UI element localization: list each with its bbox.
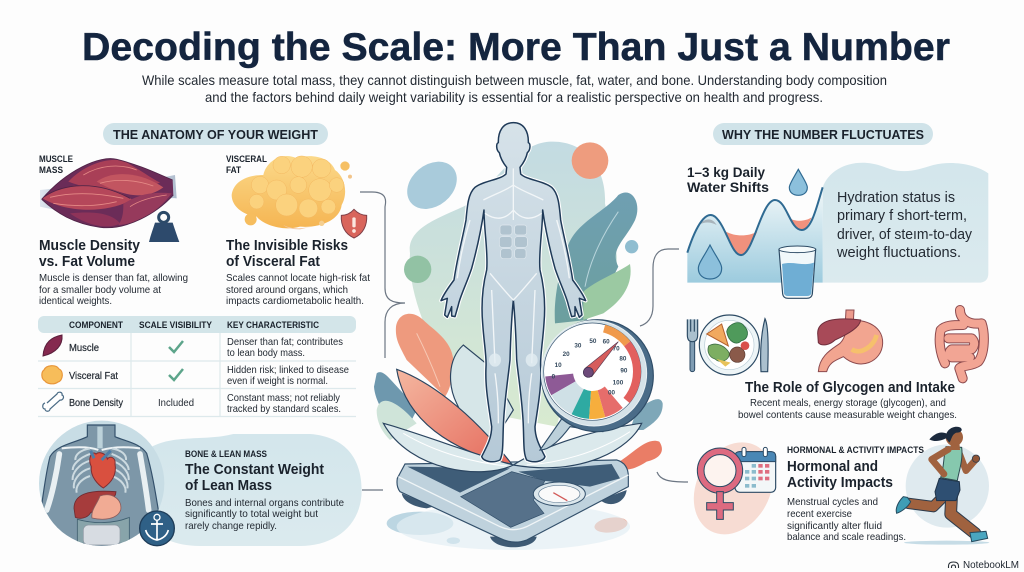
heading: the anatomy of your weight (103, 123, 328, 145)
water heading (687, 164, 769, 195)
muscle text (39, 272, 188, 307)
hormonal text: significantly alter fluid (787, 520, 882, 532)
icon: female symbol and calendar (678, 428, 788, 548)
gauge: 0 (552, 374, 556, 381)
icon: bone (43, 392, 63, 411)
intro text: and the factors behind daily weight variability is essential for a realistic perspective on health and progress. (205, 89, 823, 105)
water text: driver, of steım-to-day (837, 226, 972, 243)
visceral label (226, 154, 267, 176)
intro text: While scales measure total mass, they cannot distinguish between muscle, fat, water, and bone. Understanding body composition (142, 72, 887, 88)
gauge: 90 (620, 368, 628, 375)
icon: runner (896, 427, 989, 545)
muscle label: MUSCLE (39, 154, 73, 165)
visceral text: Scales cannot locate high-risk fat (226, 272, 370, 284)
row: muscle: Muscle (69, 343, 99, 354)
row: visceral fat (42, 364, 349, 387)
row: visceral fat: Hidden risk; linked to disease (227, 364, 349, 376)
water heading: Water Shifts (687, 179, 769, 195)
table header (38, 316, 356, 333)
hormonal heading: Hormonal and (787, 458, 878, 475)
human figure (441, 123, 586, 462)
glycogen text (738, 397, 957, 421)
icon: notebook logo (948, 562, 958, 568)
panel: hormonal and activity (678, 427, 989, 548)
water heading: 1–3 kg Daily (687, 164, 765, 180)
panel: muscle mass (39, 154, 188, 307)
connector: right water (640, 249, 679, 326)
icon: fat cloud (232, 156, 352, 229)
glycogen text: bowel contents cause measurable weight changes. (738, 409, 957, 421)
icon: anchor badge (140, 511, 174, 546)
icon: liver and stomach (818, 310, 883, 372)
muscle heading: vs. Fat Volume (39, 253, 135, 270)
hormonal text (787, 496, 906, 543)
bone heading: of Lean Mass (185, 477, 272, 494)
title: Decoding the Scale: More Than Just a Number (82, 26, 950, 69)
bone text: rarely change repidly. (185, 520, 277, 532)
visceral heading: of Visceral Fat (226, 253, 320, 270)
heading: why the number fluctuates: WHY THE NUMBER FLUCTUATES (722, 127, 924, 142)
water text (836, 189, 972, 261)
icon: check (169, 369, 183, 380)
illustration: torso with organs (39, 420, 164, 546)
connector: right hormonal (657, 472, 688, 482)
bone text (185, 497, 344, 532)
muscle heading (39, 237, 141, 270)
muscle heading: Muscle Density (39, 237, 141, 254)
muscle text: for a smaller body volume at (39, 284, 161, 296)
glycogen text: Recent meals, energy storage (glycogen), and (750, 397, 946, 409)
muscle text: Muscle is denser than fat, allowing (39, 272, 188, 284)
row: muscle (43, 335, 343, 359)
panel: bone and lean mass (33, 420, 362, 553)
row: bone density: tracked by standard scales. (227, 403, 341, 415)
muscle text: identical weights. (39, 295, 112, 307)
visceral label: FAT (226, 165, 241, 176)
hormonal label: HORMONAL & ACTIVITY IMPACTS (787, 445, 924, 456)
hormonal heading: Activity Impacts (787, 474, 893, 491)
hormonal text: balance and scale readings. (787, 531, 906, 543)
water text: Hydration status is (837, 189, 955, 206)
icon: check (169, 341, 183, 352)
bone text: significantly to total weight but (185, 508, 318, 520)
gauge: 60 (603, 339, 610, 346)
visceral text (226, 272, 370, 307)
icon: warning shield (341, 209, 367, 238)
bone heading (185, 461, 324, 494)
bone text: Bones and internal organs contribute (185, 497, 344, 509)
hormonal heading (787, 458, 893, 491)
bathroom scale (397, 460, 630, 550)
gauge: 20 (563, 351, 570, 358)
NotebookLM badge: NotebookLM (963, 559, 1019, 571)
bone label: BONE & LEAN MASS (185, 449, 267, 460)
hormonal text: Menstrual cycles and (787, 496, 878, 508)
panel: water shifts (687, 163, 988, 298)
panel: visceral fat (226, 154, 370, 307)
visceral text: impacts cardiometabolic health. (226, 295, 364, 307)
icon: small fat (42, 366, 62, 384)
glycogen heading: The Role of Glycogen and Intake (745, 380, 955, 396)
row: visceral fat: even if weight is normal. (227, 375, 328, 387)
gauge: 80 (619, 355, 627, 362)
connector: left brace (360, 192, 405, 358)
icon: intestines (940, 310, 984, 378)
row: visceral fat: Visceral Fat (69, 371, 118, 382)
water chart (687, 163, 988, 283)
muscle label: MASS (39, 165, 63, 176)
row: bone density: Included (158, 398, 194, 409)
gauge: 50 (589, 338, 597, 345)
icon: kettle weight (149, 212, 179, 242)
gauge: 70 (613, 346, 620, 353)
gauge (540, 320, 653, 450)
gauge: 30 (574, 342, 582, 349)
row: bone density: Constant mass; not reliably (227, 392, 341, 404)
leaves (383, 345, 642, 472)
water text: weight fluctuations. (836, 244, 961, 261)
visceral heading (226, 237, 348, 270)
gauge: 10 (555, 362, 562, 369)
bone heading: The Constant Weight (185, 461, 324, 478)
muscle label (39, 154, 73, 176)
row: bone density: Bone Density (69, 398, 123, 409)
visceral heading: The Invisible Risks (226, 237, 348, 254)
icon: glass of water (779, 246, 816, 298)
background shapes (374, 142, 663, 544)
panel: glycogen and intake (687, 310, 984, 421)
row: muscle: Denser than fat; contributes (227, 336, 343, 348)
row: bone density (43, 392, 341, 415)
heading: why the number fluctuates (713, 123, 933, 145)
panel: comparison table (38, 316, 356, 416)
central illustration (374, 123, 663, 550)
table header: COMPONENT (69, 320, 123, 331)
gauge: 100 (613, 379, 624, 386)
visceral label: VISCERAL (226, 154, 267, 165)
icon: water drops (698, 169, 807, 279)
visceral text: stored around organs, which (226, 284, 348, 296)
table header: SCALE VISIBILITY (139, 320, 213, 331)
table header: KEY CHARACTERISTIC (227, 320, 319, 331)
gauge: 00 (608, 390, 616, 397)
icon: plate with cutlery (687, 315, 768, 375)
connector: bone line (362, 489, 383, 491)
intro text (142, 72, 887, 105)
row: muscle: to lean body mass. (227, 347, 305, 359)
panel background (147, 434, 362, 546)
icon: muscle bundle (40, 159, 177, 228)
small scale dial (533, 482, 585, 506)
icon: small muscle (43, 335, 62, 356)
heading: the anatomy of your weight: THE ANATOMY OF YOUR WEIGHT (113, 127, 318, 142)
hormonal text: recent exercise (787, 508, 852, 520)
water text: primary f short-term, (837, 207, 967, 224)
